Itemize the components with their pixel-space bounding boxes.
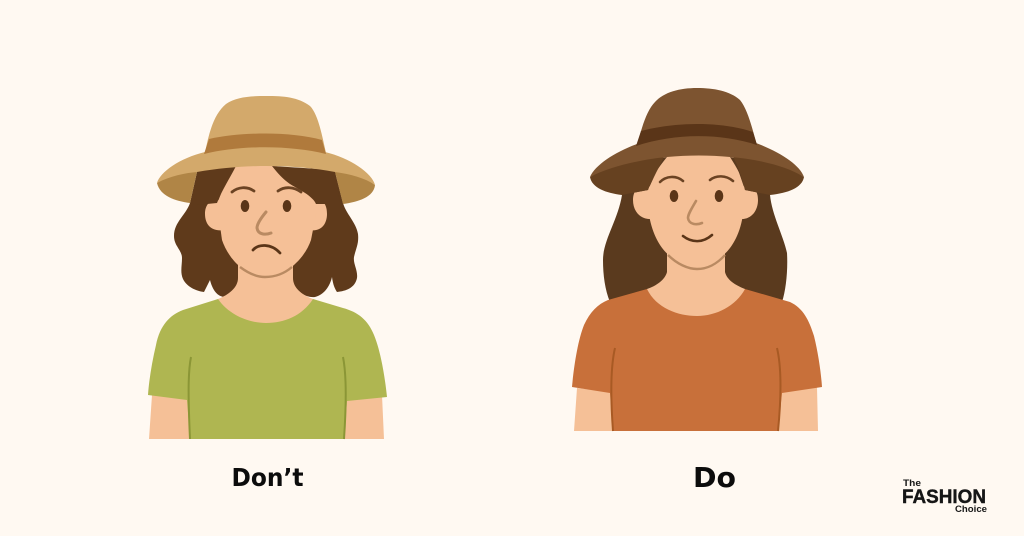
eyebrows: [232, 188, 301, 192]
long wavy hair, back: [174, 172, 358, 297]
smile: [683, 235, 712, 241]
eyes: [670, 190, 723, 202]
jaw line: [668, 255, 725, 269]
ears: [205, 200, 327, 230]
arms: [574, 387, 818, 431]
shirt body: [572, 289, 822, 431]
sleeve seams: [189, 357, 346, 439]
brim underside: [590, 150, 804, 195]
ears: [633, 186, 758, 219]
brown fedora: [590, 88, 804, 195]
neck: [218, 262, 313, 326]
front hair: [622, 157, 770, 195]
panel: do figure: [572, 88, 822, 431]
nose: [688, 201, 702, 224]
heading: do: Do: [693, 461, 736, 494]
brim: [157, 142, 375, 185]
logo: The Fashion Choice: Choice: [955, 504, 987, 515]
hat band: [636, 124, 757, 146]
crown: [637, 88, 757, 146]
sleeve seams: [611, 348, 781, 431]
neck: [647, 250, 745, 318]
arms: [149, 395, 384, 439]
front hair: [197, 166, 340, 205]
brim underside: [157, 160, 375, 204]
tan sun hat: [157, 96, 375, 204]
frown mouth: [253, 245, 280, 253]
logo: The Fashion Choice: FASHION: [902, 486, 986, 508]
brim: [590, 132, 804, 177]
crown: [205, 96, 326, 153]
shirt body: [148, 299, 387, 439]
logo: The Fashion Choice: [902, 478, 987, 515]
green t-shirt: [148, 299, 387, 439]
nose: [257, 212, 271, 234]
face: [217, 165, 318, 277]
long straight hair, back: [603, 170, 787, 302]
orange t-shirt: [572, 289, 822, 431]
logo: The Fashion Choice: The: [903, 478, 921, 489]
heading: don't: Don’t: [232, 463, 304, 492]
eyebrows: [660, 176, 733, 182]
hat band: [204, 134, 326, 154]
face: [648, 155, 745, 268]
jaw line: [240, 267, 292, 277]
eyes: [241, 200, 291, 212]
panel: don't figure: [148, 96, 387, 439]
